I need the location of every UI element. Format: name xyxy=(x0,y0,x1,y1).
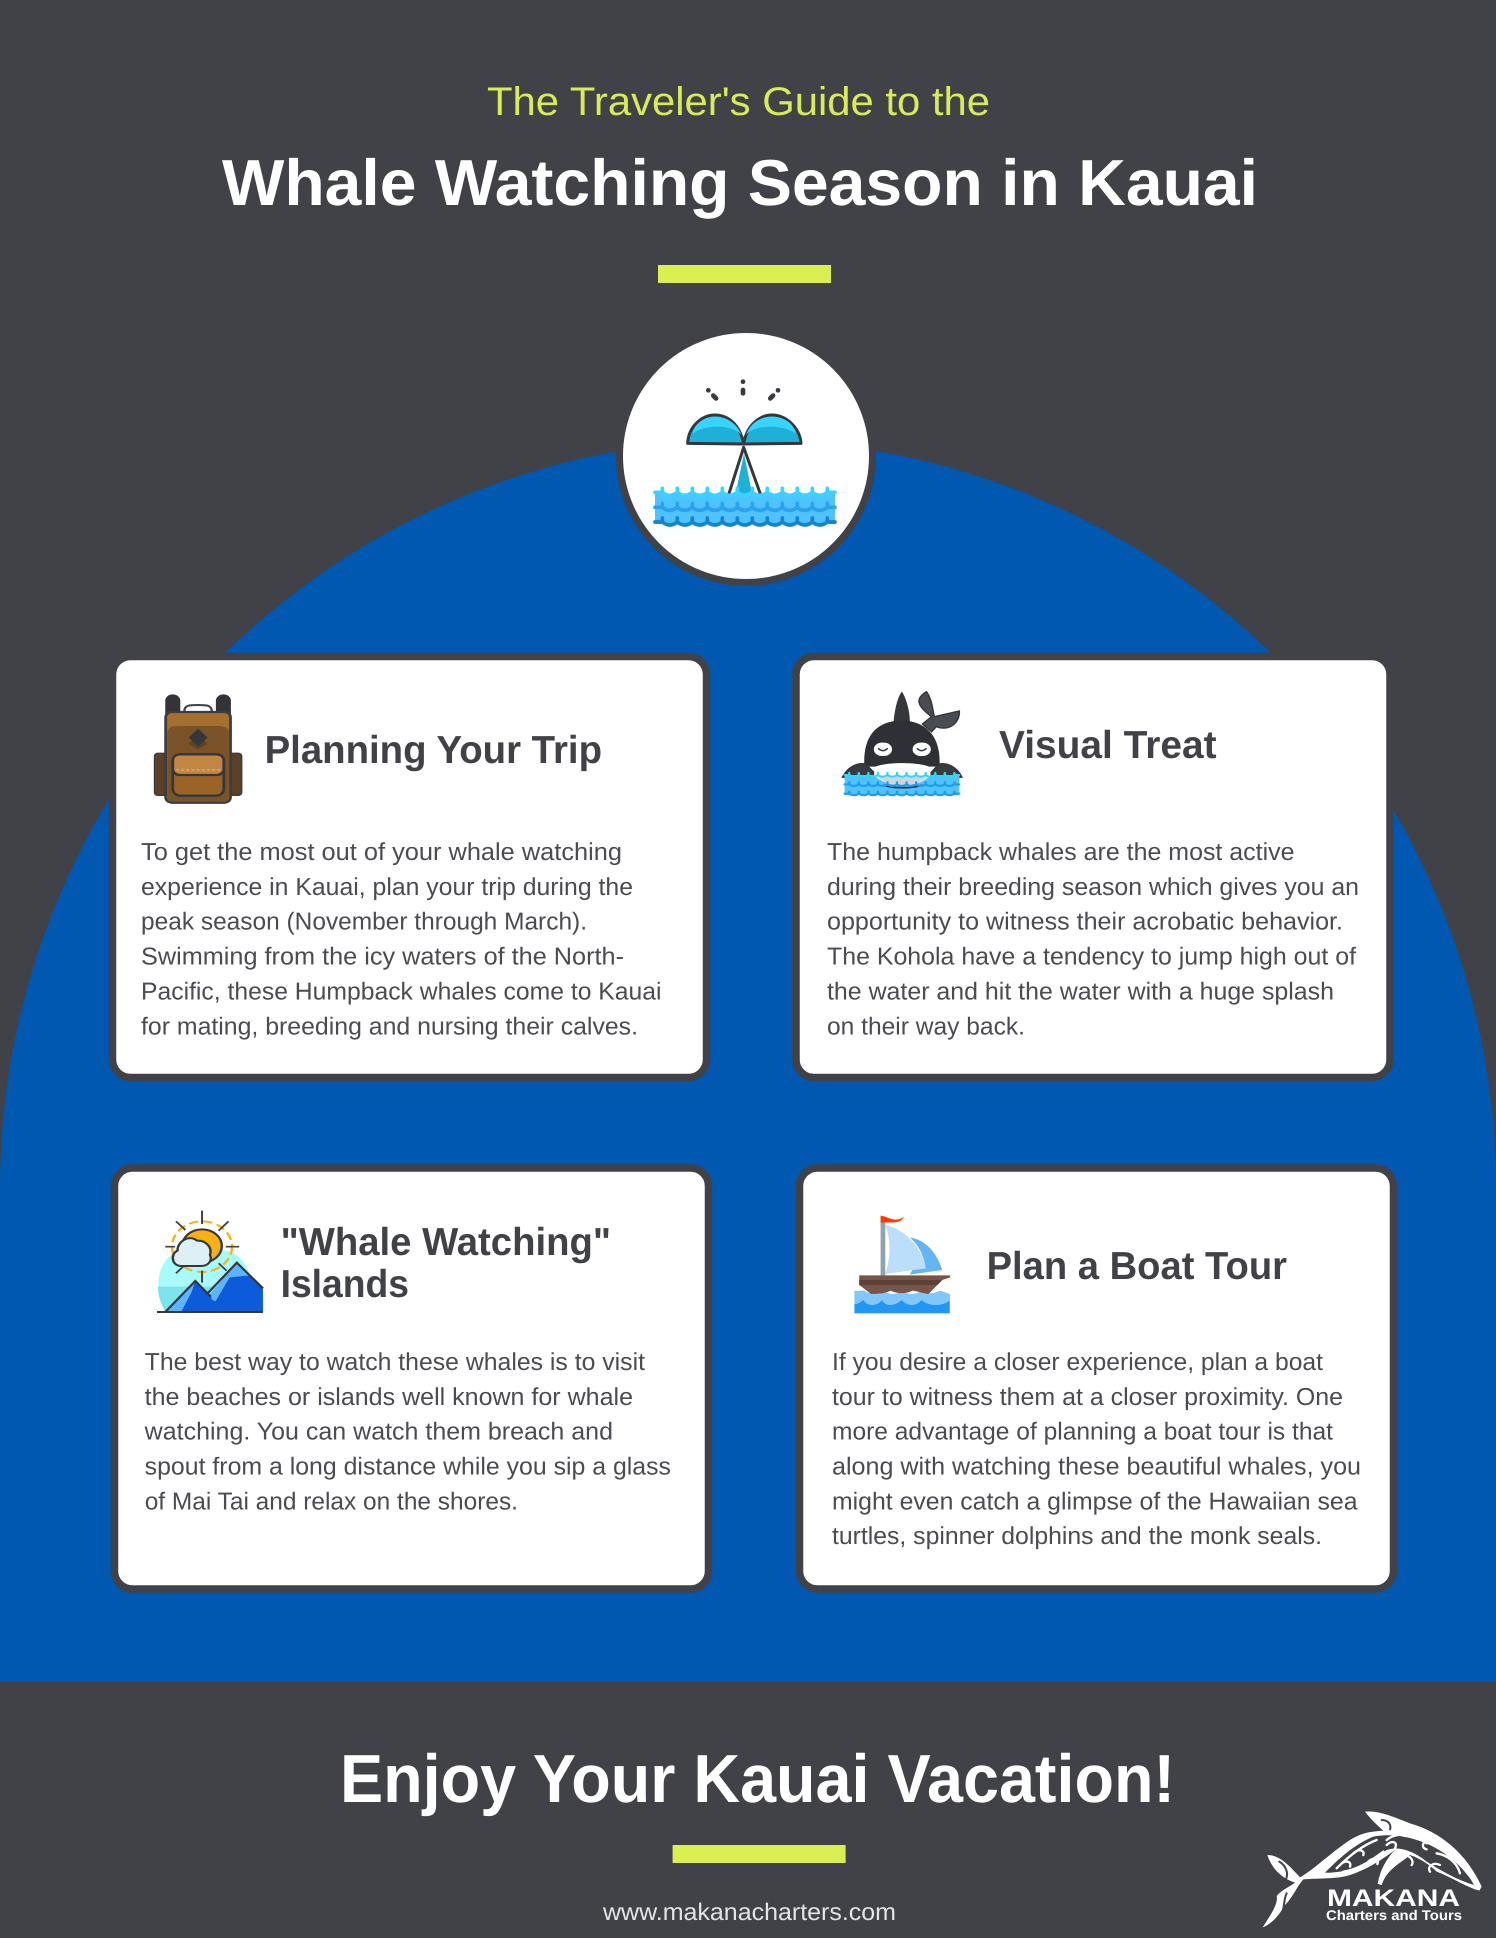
body text xyxy=(827,839,1359,1040)
body text: Pacific, these Humpback whales come to Kauai xyxy=(141,978,662,1005)
body text: The humpback whales are the most active xyxy=(827,839,1294,866)
icon: sun and mountains xyxy=(157,1211,263,1313)
panel: whale watching islands xyxy=(114,1168,708,1589)
panel: planning your trip xyxy=(112,656,706,1078)
body text: of Mai Tai and relax on the shores. xyxy=(145,1488,518,1515)
body text: for mating, breeding and nursing their calves. xyxy=(141,1013,638,1040)
body text: The Kohola have a tendency to jump high out of xyxy=(827,944,1356,970)
title accent bar xyxy=(658,265,831,283)
footer accent bar xyxy=(673,1845,846,1863)
icon: backpack xyxy=(155,694,242,803)
heading: "Whale Watching" xyxy=(281,1221,611,1264)
body text: experience in Kauai, plan your trip during the xyxy=(141,874,633,901)
heading: Visual Treat xyxy=(999,724,1217,767)
heading: Planning Your Trip xyxy=(265,729,602,772)
body text: along with watching these beautiful whales, you xyxy=(832,1454,1361,1480)
body text: peak season (November through March). xyxy=(141,909,587,936)
pre-title: The Traveler's Guide to the xyxy=(487,80,990,124)
panel: plan a boat tour xyxy=(800,1168,1394,1589)
body text: might even catch a glimpse of the Hawaiian sea xyxy=(832,1488,1358,1515)
title: Whale Watching Season in Kauai xyxy=(222,146,1258,219)
heading: Plan a Boat Tour xyxy=(987,1245,1287,1288)
body text: tour to witness them at a closer proximity. One xyxy=(832,1384,1343,1411)
body text: watching. You can watch them breach and xyxy=(144,1419,613,1446)
logo tagline: Charters and Tours xyxy=(1326,1907,1462,1923)
logo: makana dolphin xyxy=(1263,1811,1482,1927)
body text: the beaches or islands well known for whale xyxy=(145,1384,633,1411)
body text xyxy=(832,1349,1361,1550)
website url: www.makanacharters.com xyxy=(602,1899,896,1926)
body text: The best way to watch these whales is to visit xyxy=(145,1349,645,1376)
body text: Swimming from the icy waters of the North- xyxy=(141,944,624,970)
body text xyxy=(144,1349,671,1515)
body text: the water and hit the water with a huge splash xyxy=(827,978,1334,1005)
logo wordmark: MAKANA xyxy=(1327,1885,1460,1912)
panel: visual treat xyxy=(796,656,1390,1078)
footer heading: Enjoy Your Kauai Vacation! xyxy=(340,1741,1175,1817)
body text: more advantage of planning a boat tour is that xyxy=(832,1419,1333,1446)
heading second line: Islands xyxy=(281,1263,409,1306)
body text: spout from a long distance while you sip a glass xyxy=(145,1454,671,1480)
icon: whale tail in white circle xyxy=(620,330,872,582)
body text: If you desire a closer experience, plan a boat xyxy=(832,1349,1323,1376)
body text: opportunity to witness their acrobatic behavior. xyxy=(827,909,1343,936)
icon: sailboat xyxy=(854,1216,950,1313)
body text: on their way back. xyxy=(827,1013,1025,1040)
body text: turtles, spinner dolphins and the monk seals. xyxy=(832,1523,1322,1550)
body text: during their breeding season which gives you an xyxy=(827,874,1359,901)
body text xyxy=(141,839,662,1040)
body text: To get the most out of your whale watching xyxy=(141,839,622,866)
blue dome background xyxy=(0,440,1496,1682)
icon: orca xyxy=(842,692,962,795)
